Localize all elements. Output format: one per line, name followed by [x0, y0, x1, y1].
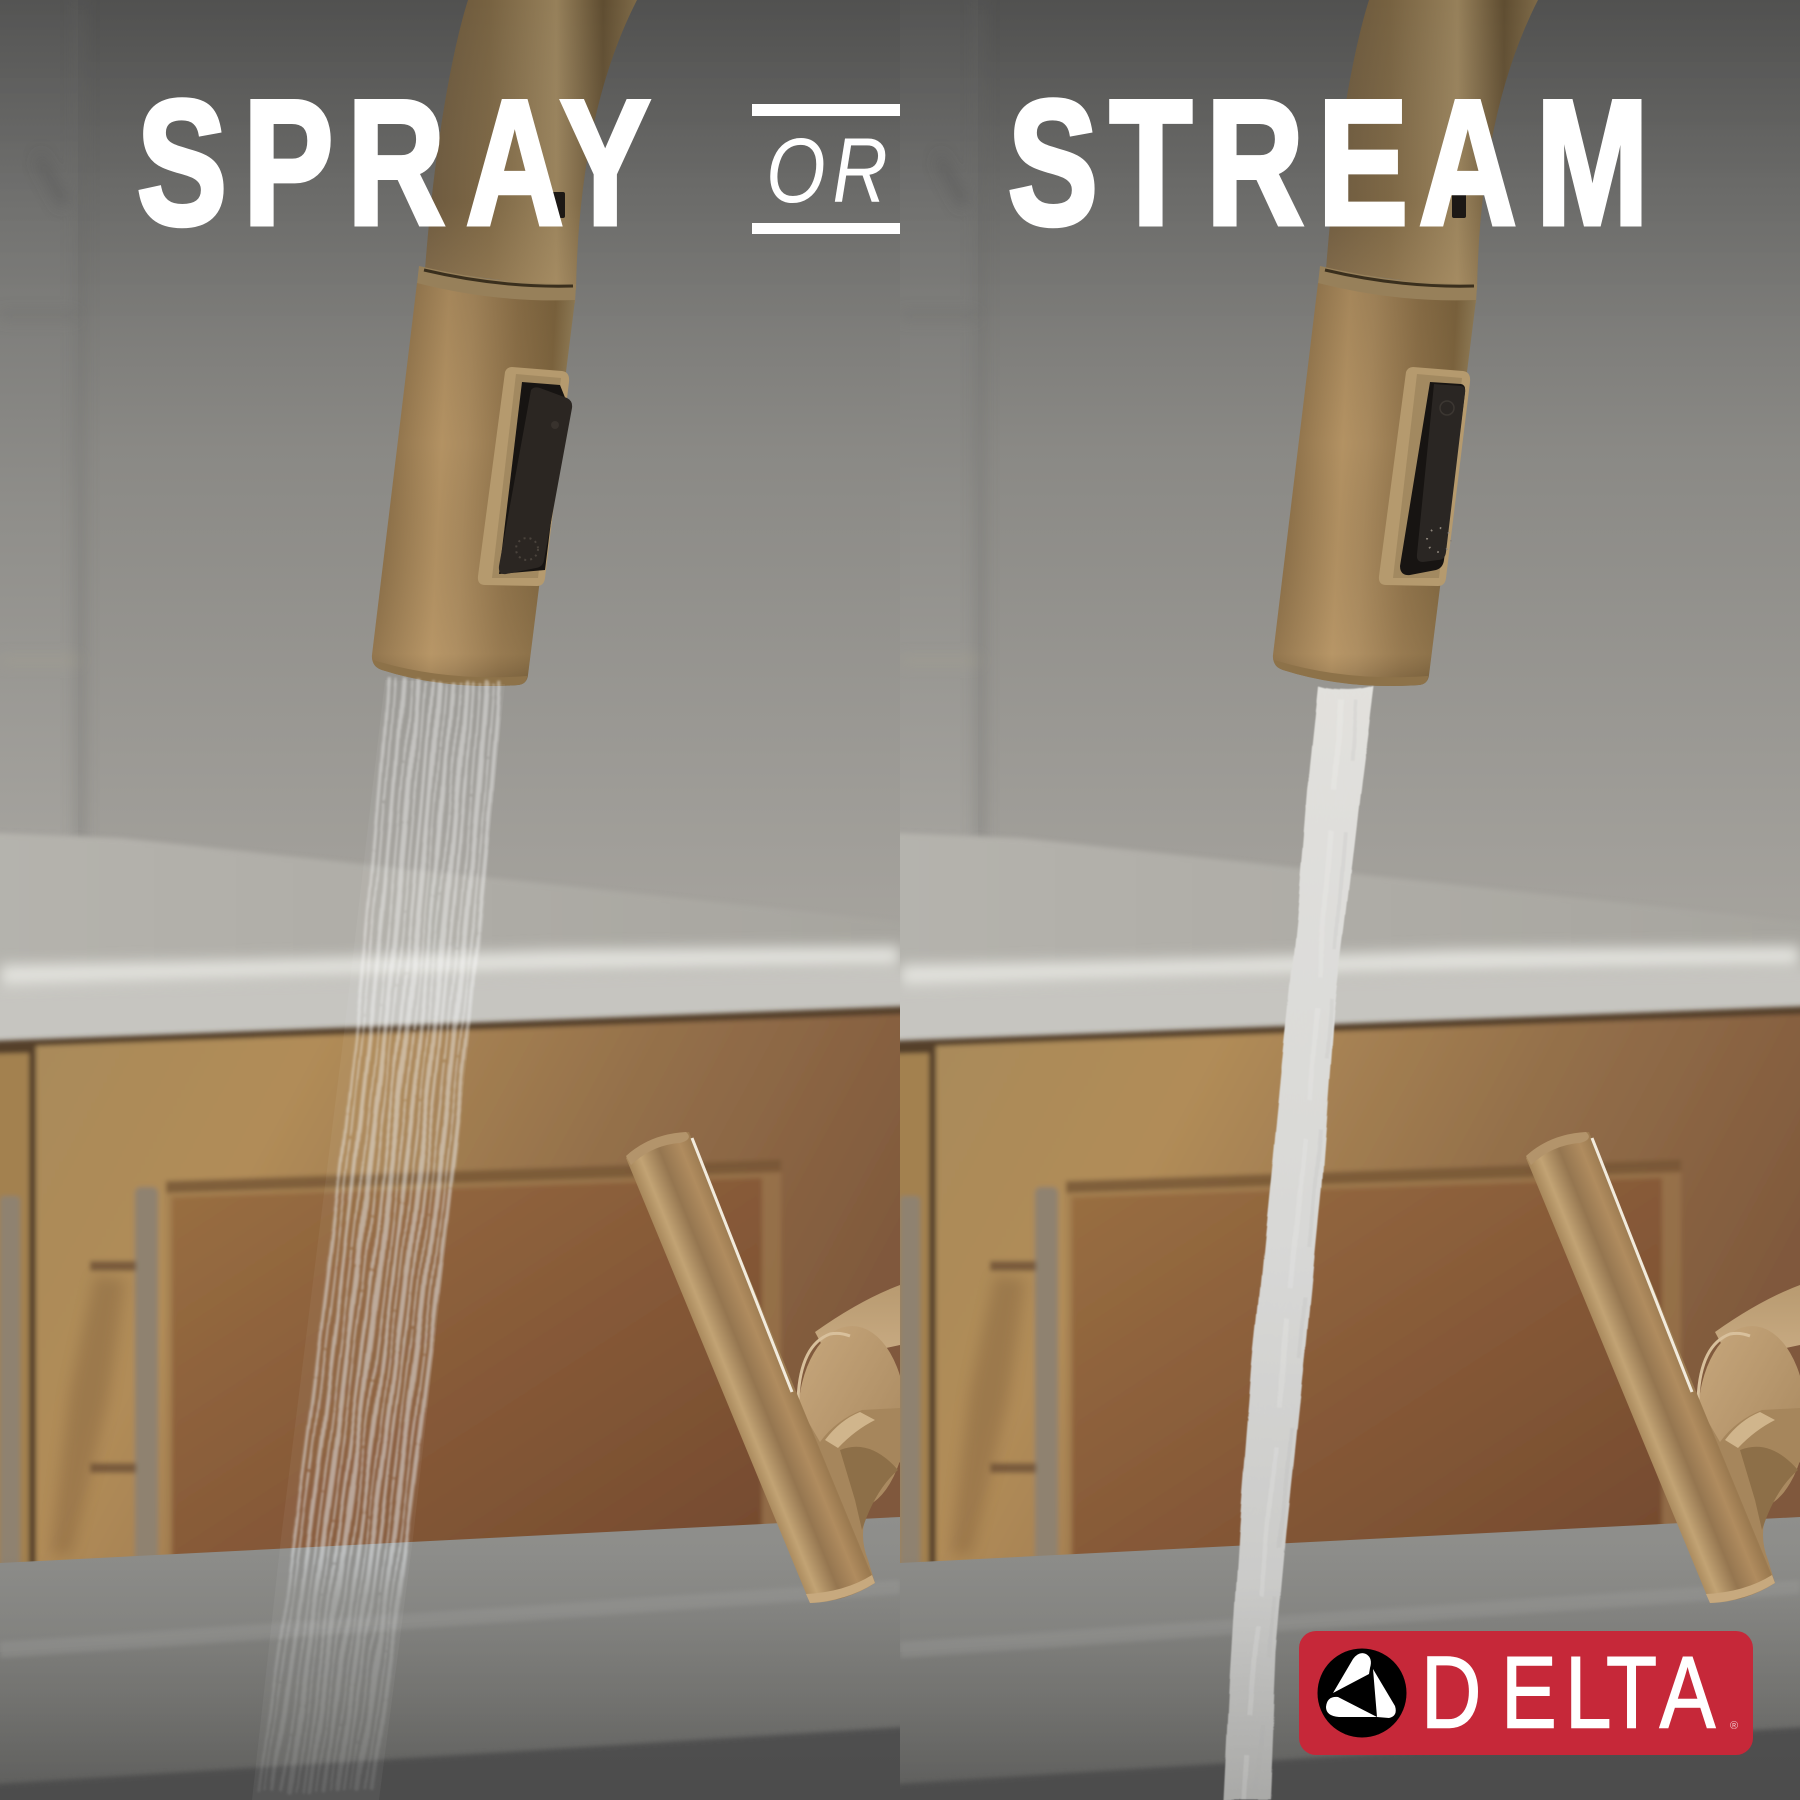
spray button in stream position [1400, 382, 1465, 575]
logo wordmark: DELTA [1421, 1636, 1716, 1749]
kitchen background [870, 0, 1800, 1800]
kitchen background [0, 0, 930, 1800]
hand lever [626, 1132, 906, 1603]
registered mark: ® [1730, 1720, 1738, 1732]
hand lever [1526, 1132, 1800, 1603]
faucet head [1273, 0, 1538, 686]
faucet head [372, 0, 637, 686]
spray button in spray position [499, 382, 572, 574]
stream of water [1224, 686, 1374, 1800]
logo: Delta [1299, 1631, 1753, 1755]
heading: spray: SPRAY [137, 64, 650, 262]
heading: or with rules: OR [766, 118, 888, 222]
spray water strands [260, 680, 500, 1790]
icon: Delta circle mark [1318, 1648, 1406, 1738]
heading: stream: STREAM [1008, 64, 1649, 262]
heading: or with rules [752, 104, 900, 234]
spray water haze [252, 680, 505, 1800]
panel: stream [900, 0, 1800, 1800]
